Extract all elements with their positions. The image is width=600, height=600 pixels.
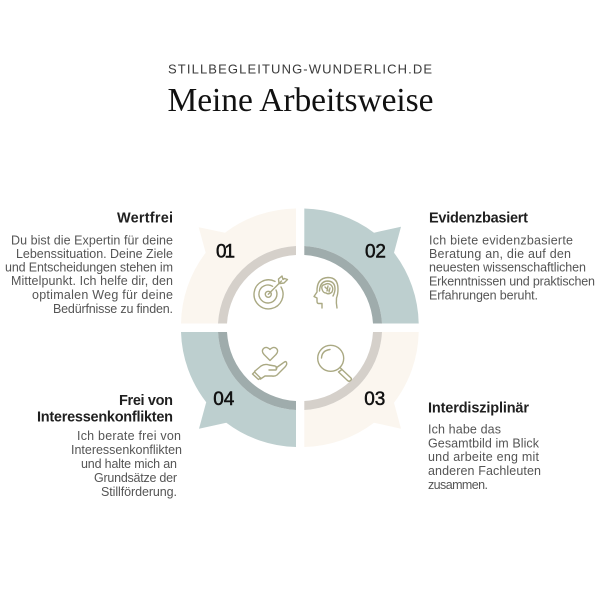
body: Interdisziplinär: zusammen. [428, 478, 488, 492]
text block: Frei von Interessenkonflikten [37, 393, 182, 499]
body: Evidenzbasiert: Erfahrungen beruht. [429, 288, 538, 302]
panel: segment 01 [181, 208, 296, 324]
body: Evidenzbasiert: Erkenntnissen und praktischen [429, 274, 595, 288]
body: Wertfrei: Lebenssituation. Deine Ziele [16, 247, 173, 261]
body: Frei von Interessenkonflikten [71, 429, 182, 499]
body: Interdisziplinär [428, 422, 541, 492]
segment 03 inner ring [304, 332, 382, 410]
segment 04 inner ring [218, 332, 296, 410]
segment 01 number: 1 [224, 242, 235, 262]
body: Wertfrei: Mittelpunkt. Ich helfe dir, den [11, 274, 173, 288]
body: Evidenzbasiert: Beratung an, die auf den [429, 247, 571, 261]
text block: Wertfrei [5, 211, 173, 316]
body: Evidenzbasiert: Ich biete evidenzbasierte [429, 233, 573, 247]
body: Interdisziplinär: und arbeite eng mit [428, 450, 540, 464]
body: Interdisziplinär: Ich habe das [428, 422, 501, 436]
body: Wertfrei: und Entscheidungen stehen im [5, 261, 173, 275]
body: Evidenzbasiert: neuesten wissenschaftlichen [429, 261, 586, 275]
heading: Wertfrei: Wertfrei [117, 211, 173, 227]
segment 03 number: 03 [364, 389, 385, 410]
heading: Evidenzbasiert: Evidenzbasiert [429, 211, 528, 227]
icon: magnifying glass [318, 345, 351, 381]
segment 02 inner ring [304, 246, 382, 324]
heading: Frei von Interessenkonflikten: Interessenkonflikten [37, 410, 173, 426]
heading: Frei von Interessenkonflikten [37, 393, 173, 426]
body: Frei von Interessenkonflikten: Ich berate frei von [77, 429, 181, 443]
panel: segment 03 [304, 332, 419, 447]
segment 01 number: 0 [216, 242, 227, 262]
website line: STILLBEGLEITUNG-WUNDERLICH.DE [168, 61, 432, 76]
text block: Evidenzbasiert [429, 211, 595, 302]
icon: heart in open hand [252, 347, 287, 380]
segment 02 number: 02 [365, 242, 386, 262]
heading: Interdisziplinär: Interdisziplinär [428, 400, 529, 416]
segment 04 number: 04 [213, 389, 235, 410]
title: Meine Arbeitsweise [168, 82, 434, 119]
body: Frei von Interessenkonflikten: Interessenkonflikten [71, 443, 182, 457]
panel: segment 02 [304, 208, 419, 324]
segment 04 arrow shape [181, 332, 296, 447]
body: Wertfrei: Du bist die Expertin für deine [11, 233, 173, 247]
segment 02 arrow shape [304, 208, 419, 324]
heading: Frei von Interessenkonflikten: Frei von [119, 393, 173, 409]
icon: target with arrow [254, 276, 288, 309]
body: Evidenzbasiert [429, 233, 595, 302]
segment 01 inner ring [218, 246, 296, 324]
body: Frei von Interessenkonflikten: Grundsätze der [94, 471, 177, 485]
body: Interdisziplinär: anderen Fachleuten [428, 464, 541, 478]
body: Frei von Interessenkonflikten: und halte mich an [81, 457, 177, 471]
body: Interdisziplinär: Gesamtbild im Blick [428, 436, 540, 450]
text block: Interdisziplinär [428, 400, 541, 492]
panel: segment 04 [181, 332, 296, 447]
body: Wertfrei: optimalen Weg für deine [32, 288, 173, 302]
segment 01 arrow shape [181, 208, 296, 324]
body: Wertfrei: Bedürfnisse zu finden. [53, 302, 173, 316]
body: Frei von Interessenkonflikten: Stillförderung. [101, 485, 177, 499]
icon: head with brain [314, 278, 338, 308]
body: Wertfrei [5, 233, 173, 316]
segment 03 arrow shape [304, 332, 419, 447]
